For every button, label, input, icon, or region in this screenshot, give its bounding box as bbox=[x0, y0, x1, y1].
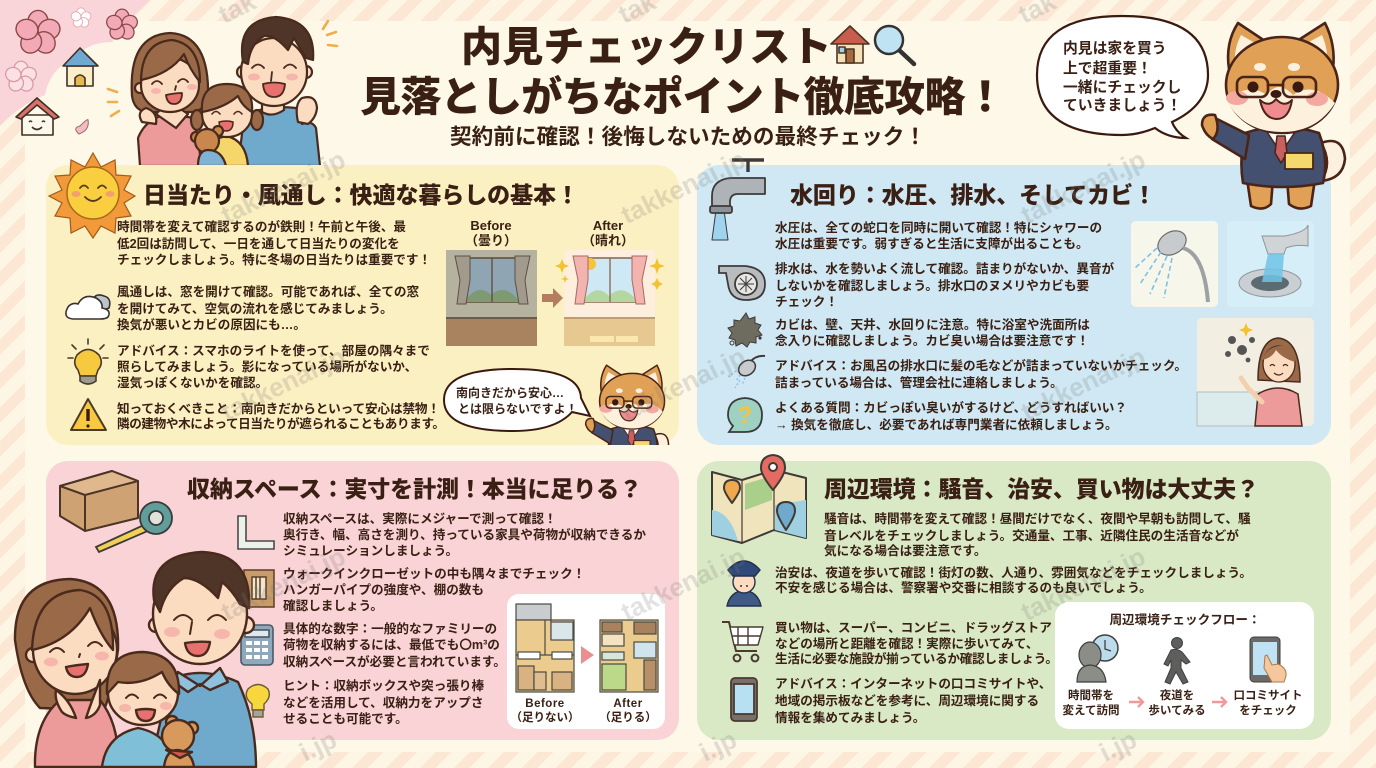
callout: small bubble bbox=[444, 369, 590, 431]
watermarks: takkenai.jp bbox=[216, 144, 350, 230]
text block: storage: などを活用して、収納力をアップさ bbox=[283, 695, 484, 710]
text block: storage: せることも可能です。 bbox=[283, 711, 408, 726]
text block: sunlight: を開けてみて、空気の流れを感じてみましょう。 bbox=[117, 301, 393, 316]
icon: blue house bbox=[63, 48, 98, 86]
panel: neighbourhood check flow bbox=[1055, 602, 1314, 729]
girl and bear bbox=[191, 84, 263, 166]
panel: water bbox=[697, 160, 1331, 445]
watermarks: takkenai.jp bbox=[1016, 144, 1150, 230]
text block: sunlight: 低2回は訪問して、一日を通して日当たりの変化を bbox=[117, 236, 400, 251]
father bbox=[237, 17, 320, 166]
watermarks: takkenai.jp bbox=[216, 341, 350, 427]
text block: storage: 確認しましょう。 bbox=[283, 598, 383, 613]
family illustration (top) bbox=[108, 17, 337, 166]
icon: police officer bbox=[727, 561, 761, 606]
text block: neighbourhood: 地域の掲示板などを参考に、周辺環境に関する bbox=[775, 693, 1039, 708]
text block: water: チェック！ bbox=[775, 295, 838, 309]
icon: tape measure bbox=[96, 502, 172, 552]
panel: neighbourhood bbox=[697, 455, 1331, 740]
text block: sunlight: 時間帯を変えて確認するのが鉄則！午前と午後、最 bbox=[117, 219, 406, 234]
heading: sunlight: 日当たり・風通し：快適な暮らしの基本！ bbox=[143, 182, 579, 208]
text block: water: → 換気を徹底し、必要であれば専門業者に依頼しましょう。 bbox=[775, 417, 1118, 432]
father bbox=[149, 552, 256, 767]
text block: storage: 具体的な数字：一般的なファミリーの bbox=[283, 621, 497, 636]
icon: magnifying glass emoji bbox=[875, 26, 914, 64]
text block: sunlight bbox=[117, 219, 445, 431]
heading: water: 水回り：水圧、排水、そしてカビ！ bbox=[790, 182, 1156, 208]
watermarks bbox=[213, 0, 1150, 767]
after image: sunny room: After bbox=[593, 218, 623, 233]
text block: neighbourhood: アドバイス：インターネットの口コミサイトや、 bbox=[775, 677, 1051, 691]
text block: sunlight: チェックしましょう。特に冬場の日当たりは重要です！ bbox=[117, 252, 431, 267]
callout: small bubble: 南向きだから安心… bbox=[456, 385, 564, 400]
text block: water: しないかを確認しましょう。排水口のヌメリやカビも要 bbox=[775, 278, 1089, 293]
title bbox=[360, 24, 1006, 120]
text block: storage: ウォークインクローゼットの中も隅々までチェック！ bbox=[283, 566, 585, 581]
icon: walking person bbox=[1164, 638, 1190, 684]
family illustration (bottom) bbox=[15, 552, 256, 767]
icon: drain bbox=[719, 266, 765, 300]
icon: question bubble: ? bbox=[738, 402, 752, 429]
text block: sunlight: 風通しは、窓を開けて確認。可能であれば、全ての窓 bbox=[117, 284, 420, 299]
arrow: plan comparison bbox=[581, 646, 594, 664]
text block: sunlight: 換気が悪いとカビの原因にも…。 bbox=[117, 317, 306, 332]
flow labels and arrows: 夜道を bbox=[1160, 688, 1194, 702]
callout: small bubble: とは限らないですよ！ bbox=[458, 402, 578, 416]
icon: person and clock bbox=[1077, 635, 1118, 682]
arrow: before to after bbox=[542, 288, 563, 308]
icon: light bulb bbox=[68, 339, 108, 384]
watermarks: takkenai.jp bbox=[616, 541, 750, 627]
text block: water: よくある質問：カビっぽい臭いがするけど、どうすればいい？ bbox=[775, 400, 1127, 415]
before image: cloudy room bbox=[446, 218, 537, 346]
callout: mascot speech bubble: ていきましょう！ bbox=[1063, 97, 1181, 114]
watermarks: takkenai.jp bbox=[616, 144, 750, 230]
text block: storage: 収納スペースが必要と言われています。 bbox=[283, 654, 506, 669]
text block: water: 念入りに確認しましょう。カビ臭い場合は要注意です！ bbox=[775, 333, 1089, 348]
text block: water: 水圧は重要です。弱すぎると生活に支障が出ることも。 bbox=[775, 236, 1089, 251]
text block: storage: 荷物を収納するには、最低でも〇m³の bbox=[283, 637, 500, 652]
image: floor plans bbox=[507, 594, 665, 729]
icon: map with pins bbox=[712, 455, 806, 543]
subtitle: 契約前に確認！後悔しないための最終チェック！ bbox=[450, 124, 926, 149]
icon: smartphone bbox=[731, 678, 757, 721]
icon: mold bbox=[728, 313, 762, 347]
callout: mascot speech bubble: 上で超重要！ bbox=[1063, 59, 1152, 77]
text block: water: カビは、壁、天井、水回りに注意。特に浴室や洗面所は bbox=[775, 317, 1090, 332]
panel: neighbourhood check flow: 周辺環境チェックフロー： bbox=[1109, 612, 1261, 627]
icon: red house with smile bbox=[16, 98, 59, 135]
text block: water: 排水は、水を勢いよく流して確認。詰まりがないか、異音が bbox=[775, 261, 1115, 276]
text block: neighbourhood: 不安を感じる場合は、警察署や交番に相談するのも良いでしょう。 bbox=[775, 580, 1152, 595]
text block: storage bbox=[283, 511, 646, 726]
mother bbox=[15, 579, 118, 767]
before plan bbox=[516, 604, 574, 692]
after image: sunny room: （晴れ） bbox=[582, 233, 634, 248]
text block: neighbourhood: 気になる場合は要注意です。 bbox=[824, 543, 986, 558]
watermarks: takkenai.jp bbox=[616, 341, 750, 427]
heading: neighbourhood: 周辺環境：騒音、治安、買い物は大丈夫？ bbox=[824, 476, 1259, 502]
text block: storage: シミュレーションしましょう。 bbox=[283, 544, 458, 558]
heading: storage: 収納スペース：実寸を計測！本当に足りる？ bbox=[187, 476, 642, 502]
text block: neighbourhood bbox=[775, 511, 1252, 725]
text block: sunlight: 照らしてみましょう。影になっている場所がないか、 bbox=[117, 359, 417, 374]
text block: neighbourhood: 買い物は、スーパー、コンビニ、ドラッグストア bbox=[775, 620, 1052, 635]
image: floor plans: Before bbox=[525, 698, 565, 710]
icon: warning triangle bbox=[71, 399, 106, 430]
icon: shower head bbox=[729, 356, 765, 388]
watermarks: i.jp bbox=[1094, 724, 1141, 767]
icon: house emoji bbox=[831, 26, 869, 63]
image: floor plans: （足りない） bbox=[510, 710, 580, 724]
image: woman finding mold bbox=[1197, 318, 1314, 426]
panel: sunlight and ventilation bbox=[46, 165, 679, 473]
text block: water: 水圧は、全ての蛇口を同時に開いて確認！特にシャワーの bbox=[775, 220, 1102, 235]
mascot: shiba in suit bbox=[1202, 23, 1345, 209]
flow labels and arrows: 歩いてみる bbox=[1148, 703, 1206, 717]
before image: cloudy room: Before bbox=[470, 218, 512, 233]
text block: neighbourhood: 騒音は、時間帯を変えて確認！昼間だけでなく、夜間や早朝も訪問して、騒 bbox=[824, 511, 1251, 526]
watermarks: takkenai.jp bbox=[1016, 341, 1150, 427]
watermarks: takkenai.jp bbox=[1016, 541, 1150, 627]
icon: L ruler bbox=[238, 516, 274, 549]
text block: neighbourhood: 治安は、夜道を歩いて確認！街灯の数、人通り、雰囲気などをチェックしましょう。 bbox=[775, 565, 1252, 580]
icon: smiling sun bbox=[49, 153, 135, 238]
image: floor plans: After bbox=[613, 698, 643, 710]
mascot: small shiba bbox=[584, 364, 670, 445]
watermarks: i.jp bbox=[294, 724, 341, 767]
flow labels and arrows bbox=[1063, 688, 1302, 717]
flow labels and arrows: をチェック bbox=[1239, 704, 1297, 717]
text block: sunlight: 湿気っぽくないかを確認。 bbox=[117, 375, 268, 390]
text block: sunlight: 知っておくべきこと：南向きだからといって安心は禁物！ bbox=[117, 401, 440, 416]
icon: cloud bbox=[66, 295, 110, 319]
decoration: sakura corner with houses bbox=[0, 0, 150, 134]
mother bbox=[132, 33, 208, 166]
icon: hint bulb bbox=[246, 684, 269, 717]
text block: neighbourhood: 生活に必要な施設が揃っているか確認しましょう。 bbox=[775, 651, 1058, 666]
flow labels and arrows: 時間帯を bbox=[1068, 688, 1114, 702]
callout: mascot speech bubble: 一緒にチェックし bbox=[1063, 78, 1181, 96]
callout: mascot speech bubble bbox=[1037, 16, 1208, 138]
icon: closet bbox=[244, 570, 274, 607]
text block: storage: ハンガーパイプの強度や、棚の数も bbox=[283, 582, 484, 597]
after plan bbox=[600, 620, 658, 692]
text block: water bbox=[775, 220, 1187, 432]
image: floor plans: （足りる） bbox=[599, 710, 657, 724]
text block: water: 詰まっている場合は、管理会社に連絡しましょう。 bbox=[775, 375, 1063, 390]
flow labels and arrows: 口コミサイト bbox=[1234, 689, 1302, 702]
text block: sunlight: アドバイス：スマホのライトを使って、部屋の隅々まで bbox=[117, 343, 430, 358]
text block: neighbourhood: などの場所と距離を確認！実際に歩いてみて、 bbox=[775, 636, 1038, 651]
text block: neighbourhood: 音レベルをチェックしましょう。交通量、工事、近隣住民の生活音などが bbox=[824, 528, 1239, 543]
icon: cardboard box bbox=[60, 471, 138, 531]
icon: calculator bbox=[241, 625, 273, 665]
title: 内見チェックリスト bbox=[461, 24, 832, 70]
image: drain with water bbox=[1227, 221, 1314, 307]
icon: shopping cart bbox=[722, 622, 763, 661]
after image: sunny room bbox=[555, 218, 665, 346]
flow labels and arrows: 変えて訪問 bbox=[1063, 703, 1119, 717]
watermarks: i.jp bbox=[694, 724, 741, 767]
child and bear bbox=[102, 652, 198, 767]
before image: cloudy room: （曇り） bbox=[465, 233, 517, 248]
text block: storage: 奥行き、幅、高さを測り、持っている家具や荷物が収納できるか bbox=[283, 527, 646, 542]
text block: neighbourhood: 情報を集めてみましょう。 bbox=[775, 710, 925, 725]
title: 見落としがちなポイント徹底攻略！ bbox=[360, 74, 1006, 120]
callout: mascot speech bubble: 内見は家を買う bbox=[1063, 40, 1167, 57]
text block: storage: 収納スペースは、実際にメジャーで測って確認！ bbox=[283, 511, 557, 526]
icon: phone and hand bbox=[1250, 637, 1286, 682]
image: shower bbox=[1131, 221, 1218, 307]
text block: sunlight: 隣の建物や木によって日当たりが遮られることもあります。 bbox=[117, 416, 445, 431]
panel: storage bbox=[46, 461, 679, 740]
text block: water: アドバイス：お風呂の排水口に髪の毛などが詰まっていないかチェック。 bbox=[775, 358, 1187, 373]
watermarks: takkenai.jp bbox=[216, 541, 350, 627]
text block: storage: ヒント：収納ボックスや突っ張り棒 bbox=[283, 678, 485, 693]
icon: question bubble bbox=[728, 398, 762, 432]
icon: faucet bbox=[710, 160, 765, 240]
